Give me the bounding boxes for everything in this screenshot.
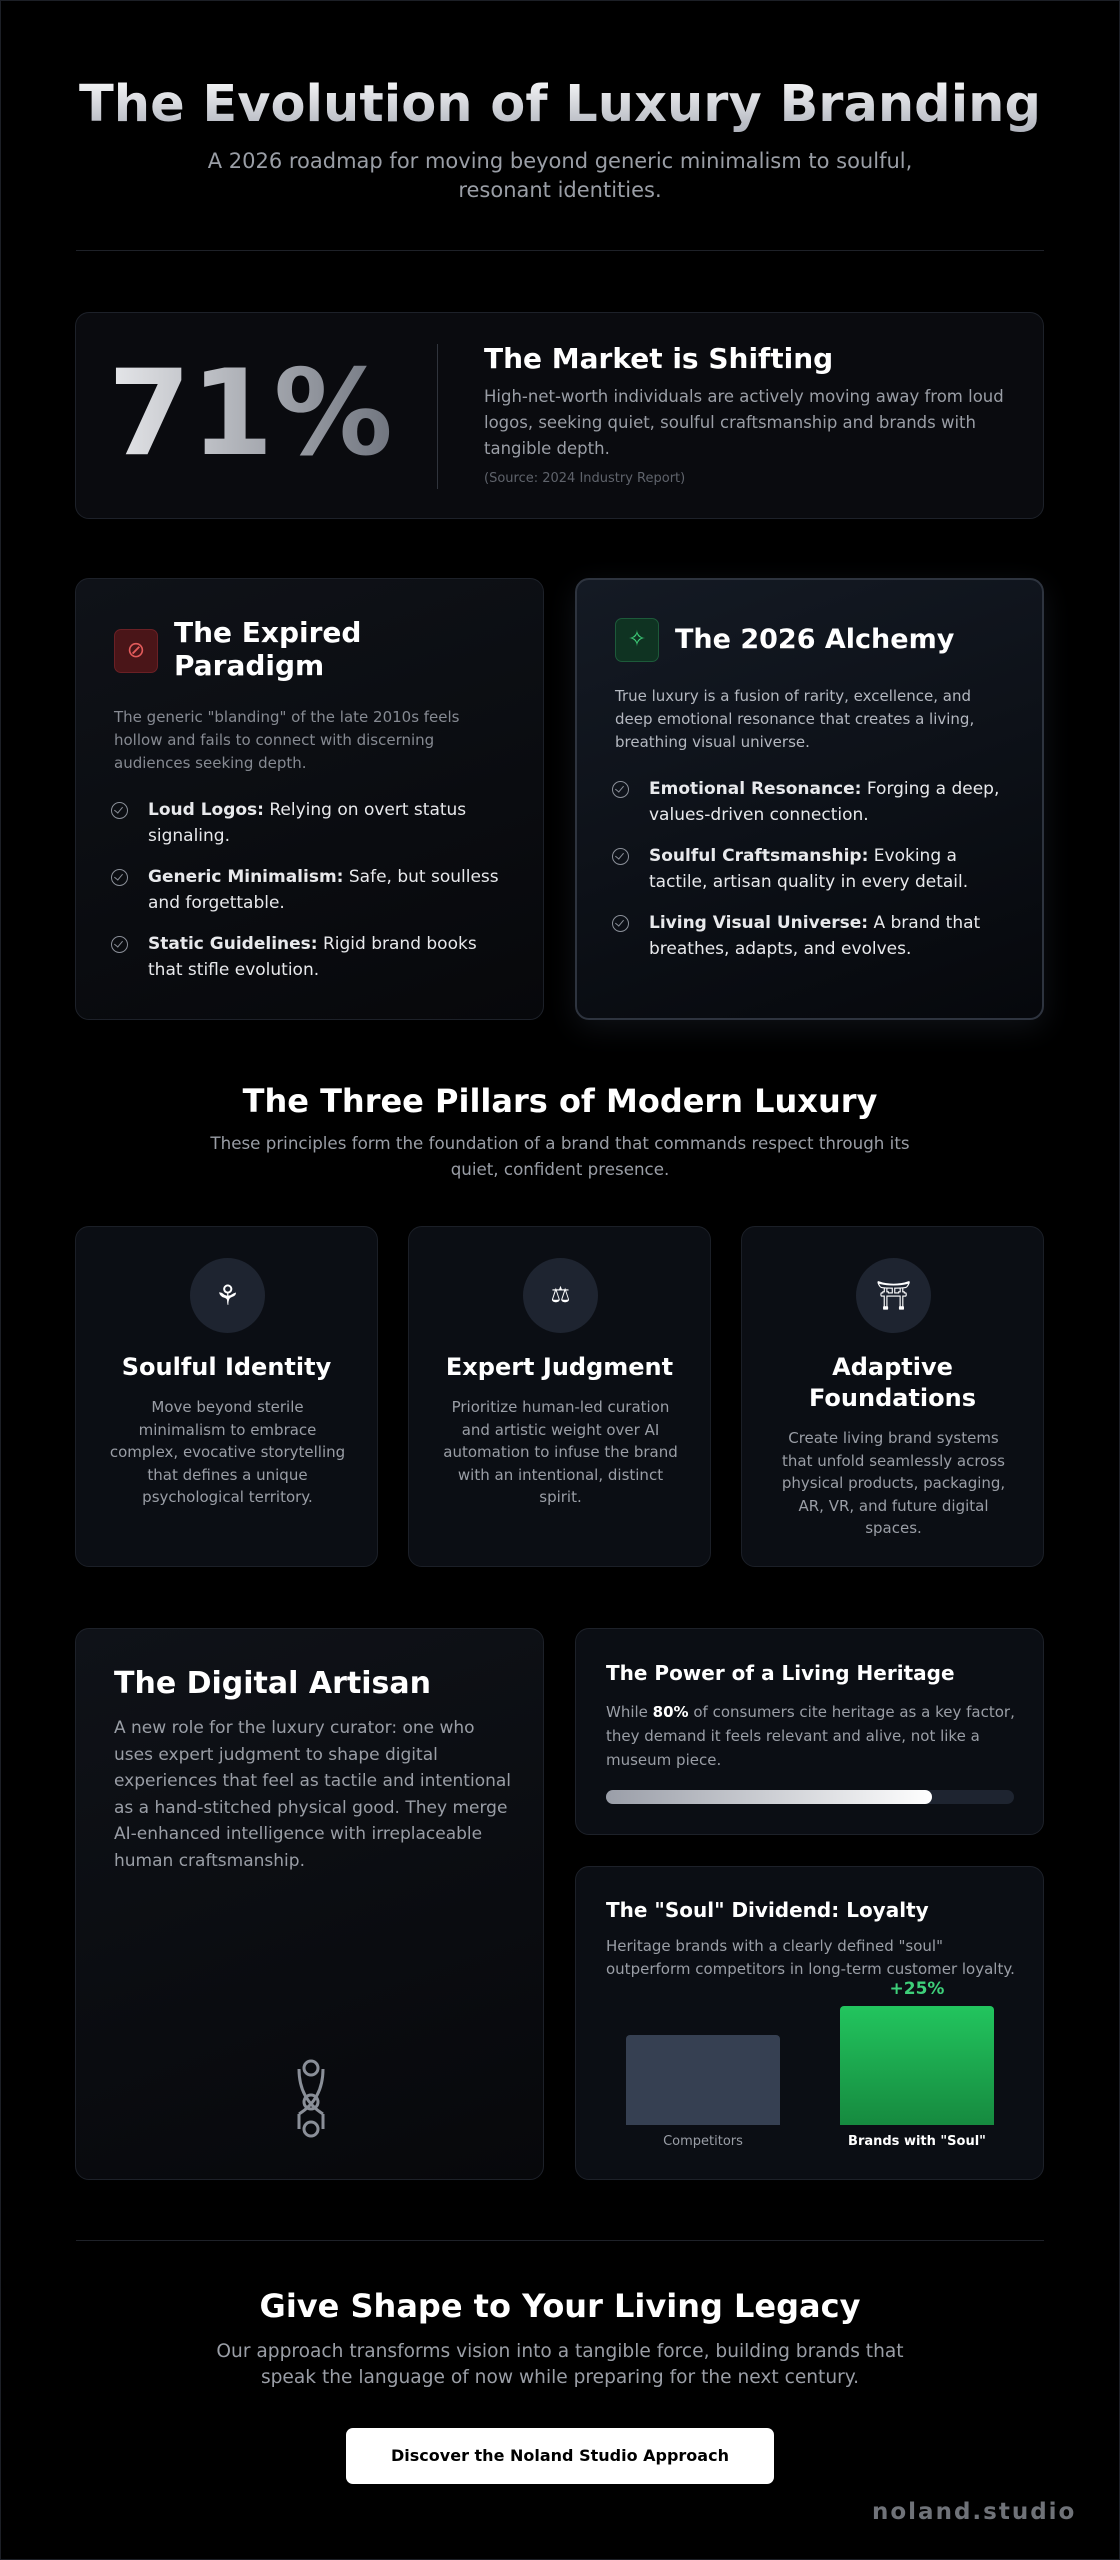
pillar: expert judgment: Expert Judgment <box>446 1353 673 1381</box>
heading: The "Soul" Dividend: Loyalty <box>606 1898 929 1922</box>
panel: expired paradigm <box>75 578 544 1020</box>
heading: The Expired <box>174 616 361 649</box>
pillar: adaptive foundations <box>741 1226 1044 1567</box>
list: Living Visual Universe: A brand that breathes, adapts, and evolves. <box>649 913 980 959</box>
heading: Paradigm <box>174 649 324 682</box>
big stat 71%: 71% <box>108 345 393 483</box>
heading: The Market is Shifting <box>484 342 833 375</box>
list: Loud Logos: Relying on overt status signaling. <box>148 800 466 846</box>
pillar: expert judgment <box>408 1226 711 1567</box>
icon <box>190 1258 265 1333</box>
body text: High-net-worth individuals are actively moving away from loud logos, seeking quiet, soulful craftsmanship and brands with tangible depth. <box>484 387 1004 458</box>
heading <box>174 616 361 682</box>
heading: The Power of a Living Heritage <box>606 1661 955 1685</box>
heading: The 2026 Alchemy <box>675 624 954 655</box>
panel: 2026 alchemy <box>575 578 1044 1020</box>
CTA text: Our approach transforms vision into a tangible force, building brands that speak the language of now while preparing for the next century. <box>216 2341 904 2388</box>
heading: The Digital Artisan <box>114 1666 431 1701</box>
icon: prohibited <box>114 629 158 673</box>
pillar: soulful identity: Soulful Identity <box>122 1353 331 1381</box>
icon: ⚘ <box>215 1279 240 1312</box>
description: True luxury is a fusion of rarity, excellence, and deep emotional resonance that creates a living, breathing visual universe. <box>615 687 974 751</box>
brand signature: noland.studio <box>872 2499 1076 2525</box>
pillar: expert judgment: Prioritize human-led curation and artistic weight over AI automation to infuse the brand with an intentional, distinct spirit. <box>443 1398 678 1506</box>
subtitle: A 2026 roadmap for moving beyond generic minimalism to soulful, resonant identities. <box>208 149 912 202</box>
panel: living heritage <box>575 1628 1044 1835</box>
description: The generic "blanding" of the late 2010s feels hollow and fails to connect with discerning audiences seeking depth. <box>114 708 460 772</box>
title: The Evolution of Luxury Branding <box>79 75 1041 134</box>
pillar: adaptive foundations: Create living brand systems that unfold seamlessly across physical products, packaging, AR, VR, and future digital spaces. <box>782 1429 1005 1537</box>
pillars subtitle: These principles form the foundation of a brand that commands respect through its quiet, confident presence. <box>210 1133 910 1179</box>
panel: soul dividend chart <box>575 1866 1044 2180</box>
CTA heading: Give Shape to Your Living Legacy <box>260 2287 860 2325</box>
icon: prohibited: ⊘ <box>127 638 145 663</box>
panel: market stat <box>75 312 1044 519</box>
icon <box>856 1258 931 1333</box>
body: Heritage brands with a clearly defined "soul" outperform competitors in long-term customer loyalty. <box>606 1937 1015 1978</box>
list <box>111 800 499 980</box>
body: A new role for the luxury curator: one who uses expert judgment to shape digital experiences that feel as tactile and intentional as a hand-stitched physical good. They merge AI-enhanced intelligence with irreplaceable human craftsmanship. <box>114 1718 511 1870</box>
pillar: soulful identity: Move beyond sterile minimalism to embrace complex, evocative storytelling that defines a unique psychological territory. <box>110 1398 345 1506</box>
panel: digital artisan <box>75 1628 544 2180</box>
CTA button <box>346 2428 774 2484</box>
icon <box>523 1258 598 1333</box>
CTA button: Discover the Noland Studio Approach <box>391 2446 729 2465</box>
list: Emotional Resonance: Forging a deep, values-driven connection. <box>649 779 999 825</box>
pillar: adaptive foundations: Foundations <box>809 1384 976 1412</box>
bar chart: Competitors <box>663 2134 743 2149</box>
progress bar 80% <box>606 1790 1014 1804</box>
list: Generic Minimalism: Safe, but soulless and forgettable. <box>148 867 499 913</box>
list <box>612 779 999 959</box>
list: Soulful Craftsmanship: Evoking a tactile, artisan quality in every detail. <box>649 846 968 892</box>
icon: ⛩ <box>876 1279 911 1312</box>
icon: ⚖ <box>551 1283 570 1308</box>
pillar: adaptive foundations: Adaptive <box>832 1353 953 1381</box>
body: While 80% of consumers cite heritage as a key factor, they demand it feels relevant and alive, not like a museum piece. <box>606 1703 1015 1769</box>
list: Static Guidelines: Rigid brand books that stifle evolution. <box>148 934 477 980</box>
bar chart <box>626 1979 994 2149</box>
bar chart: Brands with "Soul" <box>848 2134 986 2149</box>
icon: sparkle: ✧ <box>628 627 646 652</box>
pillars heading: The Three Pillars of Modern Luxury <box>243 1082 877 1120</box>
icon: dna strand <box>298 2060 324 2138</box>
pillar: soulful identity <box>75 1226 378 1567</box>
bar chart: +25% <box>890 1979 944 1999</box>
source: (Source: 2024 Industry Report) <box>484 471 685 486</box>
icon: sparkle <box>615 618 659 662</box>
